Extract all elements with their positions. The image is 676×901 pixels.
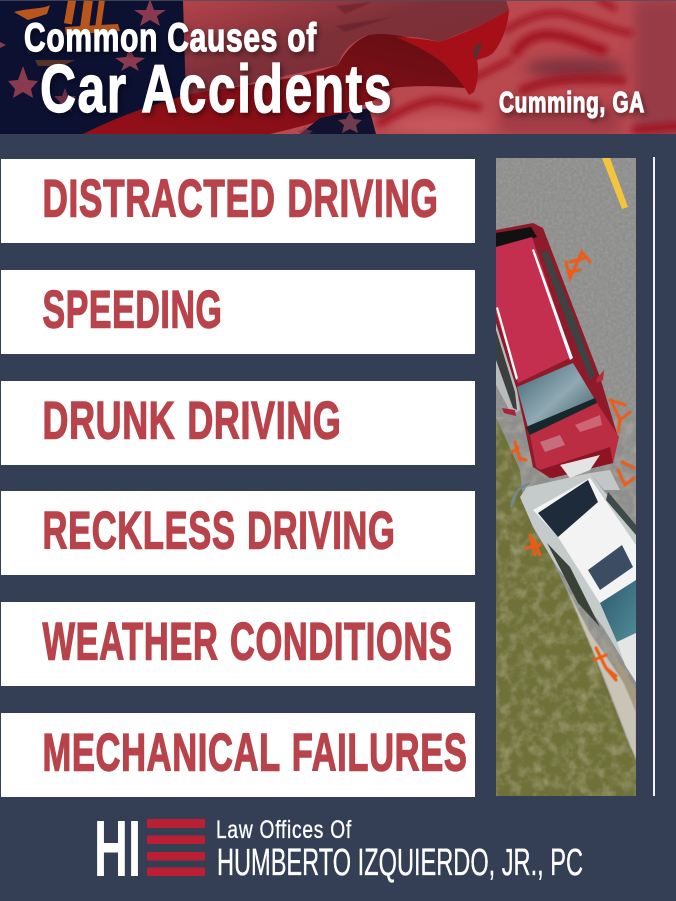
photo: aerial view of car crash: [496, 158, 636, 796]
flag stripes: [380, 0, 676, 130]
panel: speeding: SPEEDING: [42, 280, 222, 340]
icon: state seal arch: [14, 0, 120, 66]
panel: weather conditions: WEATHER CONDITIONS: [42, 612, 453, 672]
title: Common Causes of: Common Causes of: [24, 16, 317, 60]
spray paint marks: [512, 252, 634, 680]
pale flag fold: [183, 0, 509, 97]
panel: distracted driving: [1, 159, 475, 243]
panel: speeding: [1, 270, 475, 354]
navy canton: [0, 0, 186, 134]
red flag sweep: [83, 34, 465, 134]
panel: drunk driving: DRUNK DRIVING: [42, 392, 342, 450]
header banner with flag background: [0, 0, 676, 134]
curb: [565, 585, 636, 760]
lower navy corner: [300, 108, 376, 134]
panel: weather conditions: [1, 602, 475, 686]
road edge line: [602, 158, 628, 209]
panel: reckless driving: RECKLESS DRIVING: [42, 502, 396, 560]
logo mark HI: HI: [94, 804, 141, 893]
panel: drunk driving: [1, 381, 475, 465]
firm tagline: Law Offices Of: [216, 816, 352, 844]
icon: flag stars: [0, 0, 362, 134]
vertical divider line: [653, 157, 655, 796]
logo: Law Offices of Humberto Izquierdo: [94, 804, 583, 893]
panel: distracted driving: DISTRACTED DRIVING: [42, 170, 438, 228]
panel: mechanical failures: [1, 713, 475, 797]
title: Car Accidents: Car Accidents: [40, 51, 393, 127]
white car: [511, 470, 636, 682]
logo stripes: [147, 819, 205, 876]
red car: [496, 223, 619, 478]
panel: reckless driving: [1, 491, 475, 575]
